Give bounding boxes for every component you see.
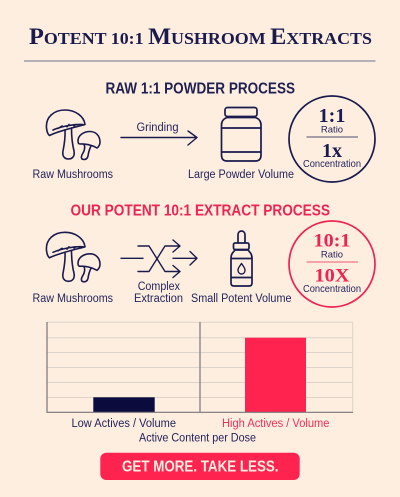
label: high actives: High Actives / Volume — [222, 418, 330, 430]
bar chart — [47, 322, 353, 444]
title: POTENT 10:1 MUSHROOM EXTRACTS — [29, 24, 372, 49]
icon: powder jar — [222, 108, 261, 161]
icon: dropper bottle — [231, 231, 252, 286]
callout: extract ratio: 10:1 — [314, 230, 350, 252]
panel: extract process: Extraction — [134, 293, 183, 305]
label: grinding: Grinding — [136, 122, 178, 134]
label: small potent volume: Small Potent Volume — [191, 293, 292, 305]
callout: extract ratio: Ratio — [321, 250, 343, 260]
arrow: grinding — [121, 131, 197, 145]
label: complex extraction: Complex — [138, 281, 180, 293]
icon: raw mushrooms — [46, 232, 100, 282]
label: raw mushrooms: Raw Mushrooms — [32, 293, 113, 305]
icon: raw mushrooms — [46, 110, 100, 160]
callout: extract ratio — [289, 221, 375, 307]
callout: raw ratio — [289, 96, 375, 182]
callout: extract ratio: Concentration — [303, 284, 361, 295]
call to action button — [100, 453, 300, 480]
callout: raw ratio: Concentration — [303, 159, 361, 170]
callout: raw ratio: Ratio — [321, 124, 343, 136]
callout: extract ratio: 10X — [314, 266, 350, 286]
callout: raw ratio: 1:1 — [319, 105, 345, 127]
axis label: Active Content per Dose — [139, 432, 256, 444]
bar: low actives — [93, 397, 155, 412]
arrow: complex extraction — [121, 240, 197, 278]
heading: raw process: RAW 1:1 POWDER PROCESS — [106, 80, 295, 98]
call to action button: GET MORE. TAKE LESS. — [122, 458, 278, 476]
callout: raw ratio: 1x — [322, 140, 342, 162]
label: low actives: Low Actives / Volume — [72, 418, 176, 430]
panel: raw process — [32, 96, 375, 182]
bar: high actives — [245, 338, 306, 412]
label: raw mushrooms: Raw Mushrooms — [32, 169, 113, 181]
label: large powder volume: Large Powder Volume — [188, 169, 294, 181]
panel: extract process — [32, 221, 375, 307]
heading: extract process: OUR POTENT 10:1 EXTRACT PROCESS — [70, 202, 330, 220]
